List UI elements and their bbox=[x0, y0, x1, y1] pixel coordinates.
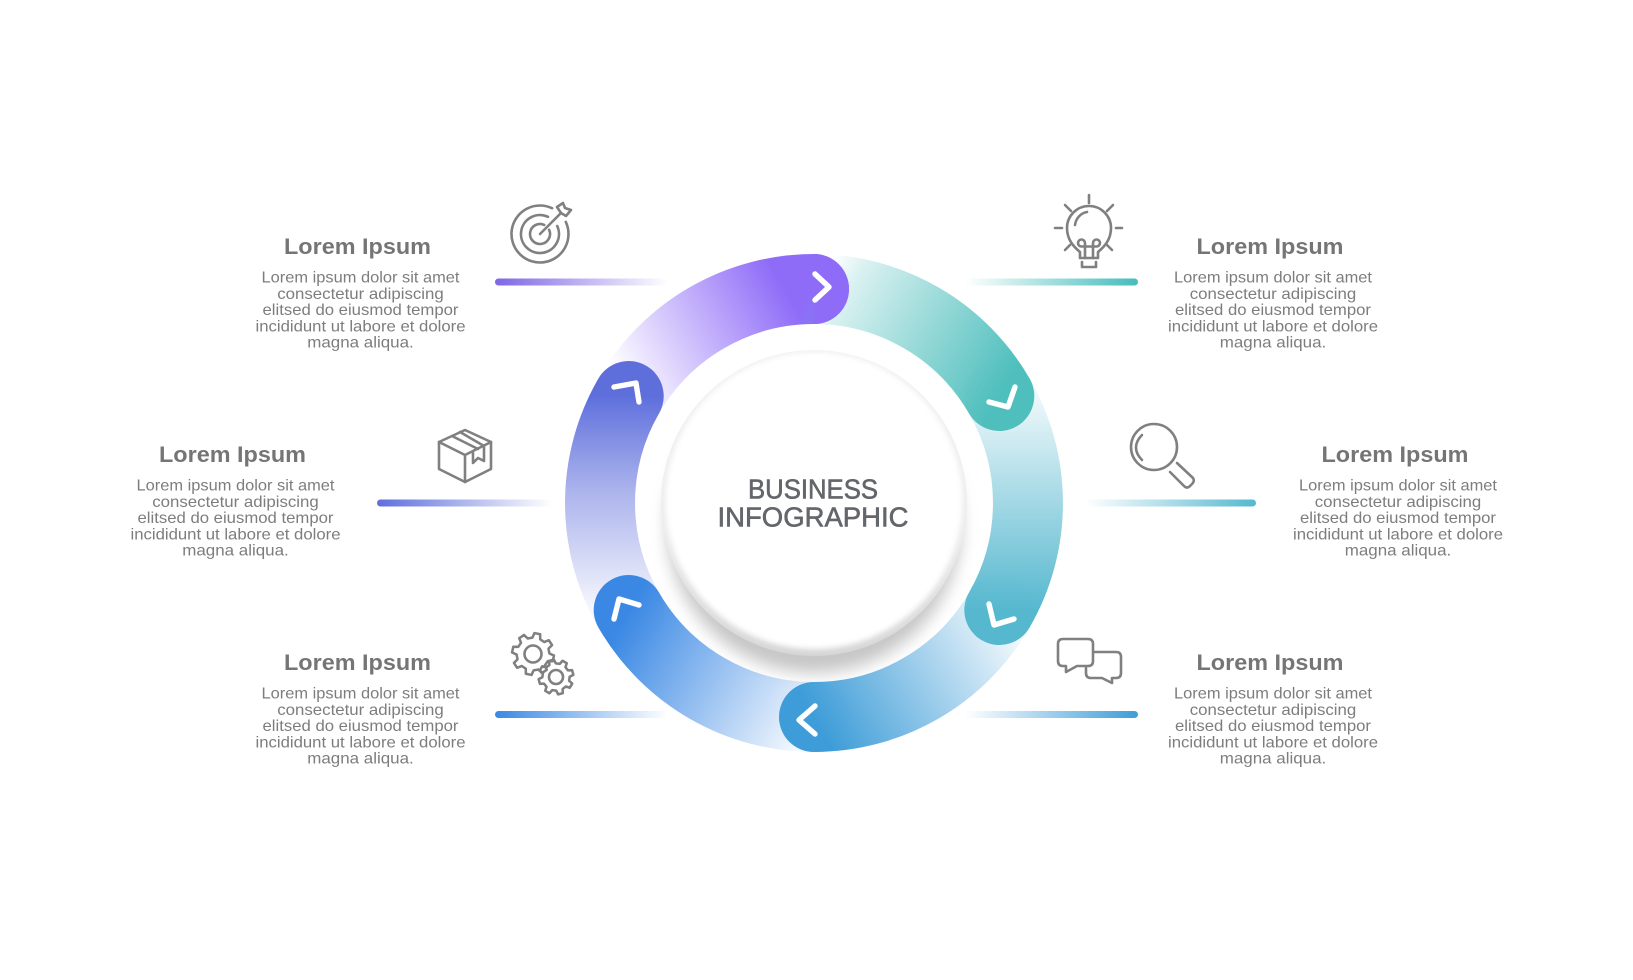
text block: middle right: Lorem Ipsum bbox=[1322, 442, 1468, 467]
connector bar: top left bbox=[495, 278, 668, 286]
text block: top right: Lorem Ipsum bbox=[1196, 234, 1344, 259]
text block: middle right: Lorem ipsum dolor sit amet bbox=[1299, 478, 1498, 495]
icon: magnifier bbox=[1131, 424, 1194, 488]
text block: bottom right: Lorem Ipsum bbox=[1196, 650, 1344, 675]
text block: middle left: consectetur adipiscing bbox=[152, 494, 319, 511]
text block: bottom right: incididunt ut labore et dolore bbox=[1168, 734, 1378, 751]
connector bar: middle right bbox=[1085, 500, 1256, 506]
text block: bottom right: consectetur adipiscing bbox=[1190, 702, 1356, 719]
text block: top right: magna aliqua. bbox=[1220, 335, 1326, 352]
center title bbox=[718, 474, 908, 532]
chevron: cyan bbox=[989, 604, 1014, 625]
text block: top right: elitsed do eiusmod tempor bbox=[1175, 302, 1372, 319]
text block: middle left: Lorem ipsum dolor sit amet bbox=[136, 478, 335, 495]
text block: middle right: consectetur adipiscing bbox=[1315, 494, 1481, 511]
text block: top left: Lorem ipsum dolor sit amet bbox=[262, 270, 460, 287]
text block: bottom left: magna aliqua. bbox=[307, 751, 414, 768]
text block: top right: consectetur adipiscing bbox=[1190, 286, 1356, 303]
arrow segment: cyan bbox=[999, 396, 1028, 610]
text block: middle right bbox=[1293, 442, 1503, 560]
icon: gears bbox=[508, 629, 580, 701]
text block: bottom left: incididunt ut labore et dolore bbox=[256, 734, 466, 751]
text block: bottom right: Lorem ipsum dolor sit amet bbox=[1174, 686, 1373, 703]
text block: middle left: incididunt ut labore et dolore bbox=[130, 526, 341, 543]
arrow segment: lower blue bbox=[814, 610, 999, 717]
text block: top left: elitsed do eiusmod tempor bbox=[262, 302, 459, 319]
text block: bottom left: Lorem ipsum dolor sit amet bbox=[262, 686, 460, 703]
connector bar: middle left bbox=[377, 500, 552, 506]
chevron: lower blue bbox=[799, 706, 815, 734]
icon: target bbox=[511, 203, 571, 263]
arrow segment: teal bbox=[814, 289, 999, 396]
connector bar: top right bbox=[965, 278, 1138, 286]
text block: middle left: elitsed do eiusmod tempor bbox=[138, 510, 334, 527]
text block: top left: consectetur adipiscing bbox=[277, 286, 444, 303]
arrow segment: indigo bbox=[600, 396, 629, 610]
connector bar: bottom right bbox=[965, 711, 1138, 718]
center title: BUSINESS bbox=[748, 474, 878, 504]
chevron: purple bbox=[815, 274, 829, 300]
arrow segment: purple bbox=[629, 289, 814, 396]
text block: top left bbox=[256, 234, 466, 352]
text block: middle right: elitsed do eiusmod tempor bbox=[1300, 510, 1497, 527]
icon: light bulb bbox=[1055, 195, 1122, 267]
center circle bbox=[661, 350, 967, 656]
purple arrow head bbox=[814, 254, 849, 324]
text block: middle right: incididunt ut labore et dolore bbox=[1293, 526, 1503, 543]
icon: box bbox=[439, 430, 491, 482]
text block: bottom right bbox=[1168, 650, 1378, 768]
chevron: teal bbox=[989, 387, 1015, 407]
text block: bottom right: magna aliqua. bbox=[1220, 751, 1326, 768]
text block: middle left bbox=[130, 442, 341, 560]
chevron: indigo bbox=[614, 383, 639, 402]
text block: middle left: Lorem Ipsum bbox=[159, 442, 306, 467]
chevron: bright blue bbox=[614, 599, 639, 619]
center circle drop shadow bbox=[667, 379, 961, 673]
chevrons on arrow heads bbox=[614, 274, 1015, 734]
text block: bottom left: elitsed do eiusmod tempor bbox=[262, 718, 459, 735]
text block: middle right: magna aliqua. bbox=[1345, 543, 1451, 560]
text block: top right: incididunt ut labore et dolore bbox=[1168, 318, 1378, 335]
text block: top right: Lorem ipsum dolor sit amet bbox=[1174, 270, 1373, 287]
arrow segment: bright blue bbox=[629, 610, 814, 717]
ring of six gradient arrows bbox=[600, 289, 1028, 717]
text block: bottom left bbox=[256, 650, 466, 768]
text block: bottom left: Lorem Ipsum bbox=[284, 650, 431, 675]
text block: bottom left: consectetur adipiscing bbox=[277, 702, 444, 719]
text block: middle left: magna aliqua. bbox=[182, 543, 289, 560]
center title: INFOGRAPHIC bbox=[718, 502, 908, 532]
text block: top left: incididunt ut labore et dolore bbox=[256, 318, 466, 335]
connector bar: bottom left bbox=[495, 711, 668, 718]
text block: top left: Lorem Ipsum bbox=[284, 234, 431, 259]
text block: top right bbox=[1168, 234, 1378, 352]
text block: bottom right: elitsed do eiusmod tempor bbox=[1175, 718, 1372, 735]
text block: top left: magna aliqua. bbox=[307, 335, 414, 352]
icon: chat bubbles bbox=[1058, 639, 1121, 683]
